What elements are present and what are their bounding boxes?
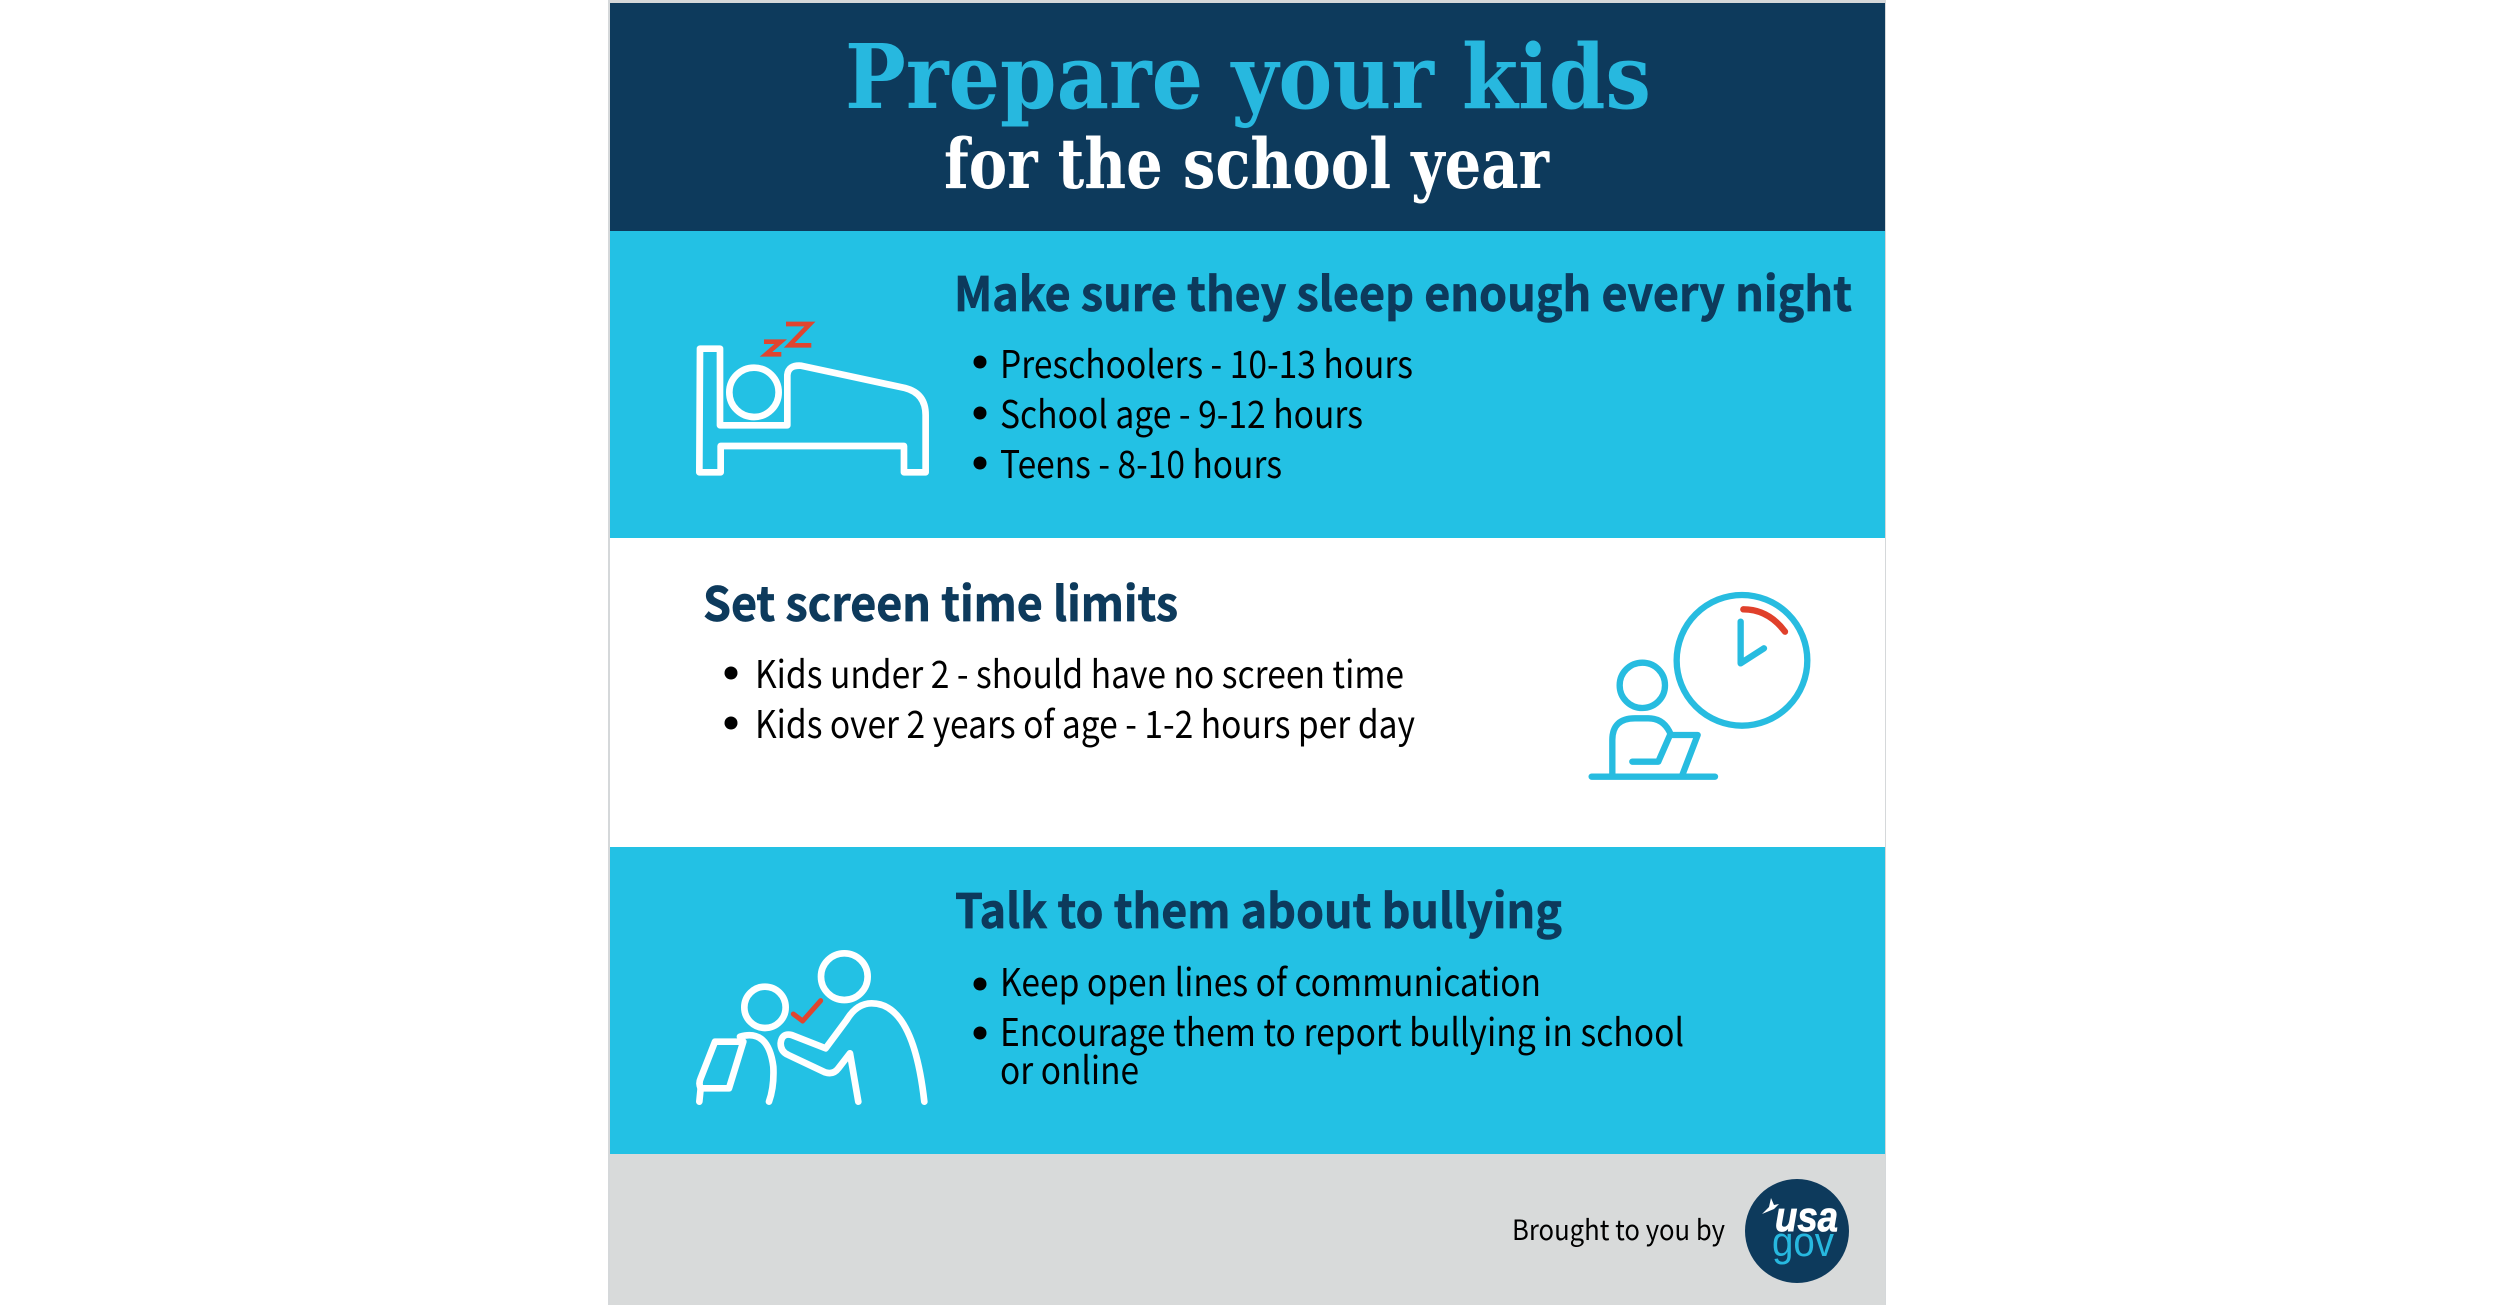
list: sleep hours: Preschoolers - 10-13 hours (1000, 334, 1413, 389)
icon: red check (793, 1001, 821, 1021)
panel: screen time (610, 538, 1885, 847)
credit text: Brought to you by (1512, 1209, 1725, 1249)
panel: bullying (610, 847, 1885, 1154)
list: sleep hours: School age - 9-12 hours (1000, 384, 1363, 439)
list: bullying tips: Keep open lines of communication (1000, 952, 1541, 1007)
subtitle: for the school year: for the school year (944, 124, 1550, 205)
list: bullying tips: or online (1000, 1040, 1139, 1095)
logo: USA gov: gov (1772, 1218, 1834, 1265)
list: sleep hours: Teens - 8-10 hours (1000, 434, 1282, 489)
heading: bullying: Talk to them about bullying (955, 873, 1562, 942)
panel: footer (610, 1154, 1885, 1305)
icon: sleeping person in bed (699, 324, 926, 472)
logo: USA gov: usa (1775, 1193, 1838, 1240)
heading: screen time: Set screen time limits (703, 566, 1178, 635)
title: Prepare your kids: Prepare your kids (845, 24, 1651, 129)
panel: header (610, 3, 1885, 231)
logo: USA gov (1745, 1179, 1849, 1283)
icon: red clock arc (1743, 609, 1785, 632)
list: sleep hours (974, 334, 1413, 489)
list: screen time limits: Kids under 2 - should have no screen time (755, 644, 1404, 699)
list: screen time limits: Kids over 2 years of age - 1-2 hours per day (755, 694, 1415, 749)
panel: sleep (610, 231, 1885, 538)
icon: person at laptop with clock (1592, 595, 1807, 777)
list: bullying tips (974, 952, 1684, 1095)
list: screen time limits (724, 644, 1415, 749)
icon: adult comforting child (699, 953, 924, 1102)
list: bullying tips: Encourage them to report bullying in school (1000, 1002, 1684, 1057)
heading: sleep: Make sure they sleep enough every night (954, 256, 1852, 325)
icon: red zz (764, 324, 811, 354)
